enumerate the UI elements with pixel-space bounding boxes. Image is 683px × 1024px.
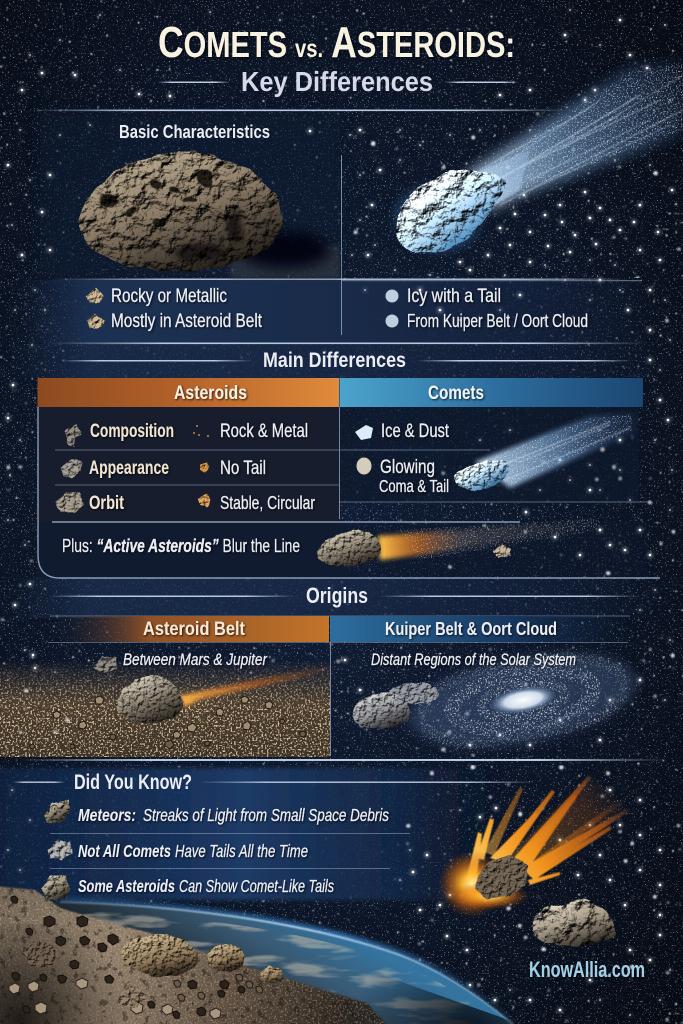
text: rocky or metallic: Rocky or Metallic (111, 286, 227, 307)
surface pebbles (9, 896, 263, 1019)
caption: between mars and jupiter: Between Mars & Jupiter (123, 651, 268, 669)
large grey rock (533, 901, 617, 948)
fact: some asteroids: Can Show Comet-Like Tails (179, 876, 334, 896)
fact: meteors (44, 800, 389, 825)
panel: basic characteristics (50, 58, 683, 335)
panel: section bands (0, 111, 675, 900)
table header: asteroids (38, 378, 339, 407)
small rock fragment (493, 544, 511, 558)
fact: some asteroids (41, 875, 334, 900)
table comet tail (475, 412, 636, 488)
icon: rock bullet 2 (86, 313, 104, 328)
table header: comets: Comets (428, 382, 484, 404)
active asteroid flame (378, 518, 600, 560)
callout: active asteroids (62, 518, 600, 566)
row: glowing coma and tail (356, 457, 449, 496)
icon: rock bullet 1 (86, 288, 104, 303)
comet nucleus illustration (396, 169, 505, 253)
header: kuiper belt and oort cloud: Kuiper Belt & Oort Cloud (385, 619, 557, 639)
panel: origins (0, 616, 644, 761)
earth (0, 902, 520, 1024)
rocky surface (0, 886, 395, 1024)
row: orbit: Orbit (89, 493, 125, 514)
fact: meteors: Meteors: (78, 805, 136, 825)
heading: did you know: Did You Know? (74, 771, 192, 794)
active asteroid rock (318, 530, 381, 566)
fact: not all comets: Not All Comets (78, 841, 171, 861)
row: ice and dust: Ice & Dust (381, 421, 450, 442)
distant rock small (389, 682, 438, 704)
belt pebbles (30, 696, 306, 749)
text: icy with a tail: Icy with a Tail (407, 286, 501, 307)
surface rock cluster (118, 985, 146, 1008)
distant rock large (352, 693, 410, 728)
row: glowing coma and tail: Coma & Tail (379, 476, 449, 496)
surface rock small (260, 965, 283, 984)
row: orbit: Stable, Circular (220, 493, 315, 513)
surface rock left (23, 941, 60, 967)
fact: some asteroids: Some Asteroids (78, 876, 175, 896)
fact: not all comets: Have Tails All the Time (175, 841, 308, 861)
row: composition (64, 421, 308, 447)
asteroid belt illustration (0, 650, 330, 757)
panel: did you know (13, 771, 535, 900)
surface rock medium (206, 944, 245, 971)
panel: main differences table (38, 378, 660, 578)
meteor rock (476, 854, 528, 899)
brand: knowallia.com: KnowAllia.com (529, 957, 645, 982)
heading: main differences: Main Differences (263, 349, 406, 372)
heading: origins: Origins (306, 583, 368, 608)
fact: not all comets (48, 840, 308, 861)
table header: asteroids: Asteroids (174, 382, 247, 404)
row: ice and dust (355, 421, 450, 442)
meteor illustration (438, 776, 652, 948)
row: appearance: No Tail (220, 458, 266, 479)
table header: comets (340, 378, 643, 407)
belt large rock (116, 675, 182, 723)
row: appearance: Appearance (89, 458, 169, 479)
text: mostly in asteroid belt: Mostly in Asteroid Belt (111, 311, 263, 332)
asteroid illustration (82, 152, 284, 272)
table comet nucleus (454, 460, 509, 490)
icon: comet halo (388, 178, 488, 258)
panel outline (38, 407, 660, 578)
row: glowing coma and tail: Glowing (380, 457, 435, 478)
planet and rocky foreground (0, 886, 520, 1024)
surface rock large (121, 934, 198, 977)
belt flame streak (178, 666, 330, 707)
header: asteroid belt: Asteroid Belt (143, 618, 245, 640)
icon: shadow under asteroid (230, 232, 340, 279)
callout: active asteroids: Plus: “Active Asteroids” Blur the Line (62, 536, 300, 556)
earth limb glow (60, 902, 520, 1024)
kuiper belt and oort cloud illustration (352, 639, 644, 761)
text: from kuiper belt / oort cloud: From Kuiper Belt / Oort Cloud (407, 310, 588, 331)
header: kuiper belt and oort cloud (330, 616, 630, 642)
fact: meteors: Streaks of Light from Small Space Debris (143, 805, 389, 825)
icon: ice bullet 2 (386, 314, 398, 328)
icon: ice bullet 1 (386, 290, 398, 302)
comet tail (465, 58, 683, 210)
heading: basic characteristics: Basic Characteristics (119, 122, 270, 142)
row: orbit (56, 492, 315, 514)
meteor flames (438, 776, 652, 918)
galaxy (402, 639, 644, 761)
header: asteroid belt (50, 616, 329, 642)
caption: distant regions: Distant Regions of the Solar System (371, 651, 576, 669)
subtitle: key differences: Key Differences (241, 66, 433, 97)
belt small rock (92, 656, 117, 674)
row: composition: Rock & Metal (220, 421, 308, 442)
title: COMETS vs. ASTEROIDS: (158, 18, 515, 67)
row: appearance (61, 458, 266, 479)
row: composition: Composition (90, 421, 174, 442)
